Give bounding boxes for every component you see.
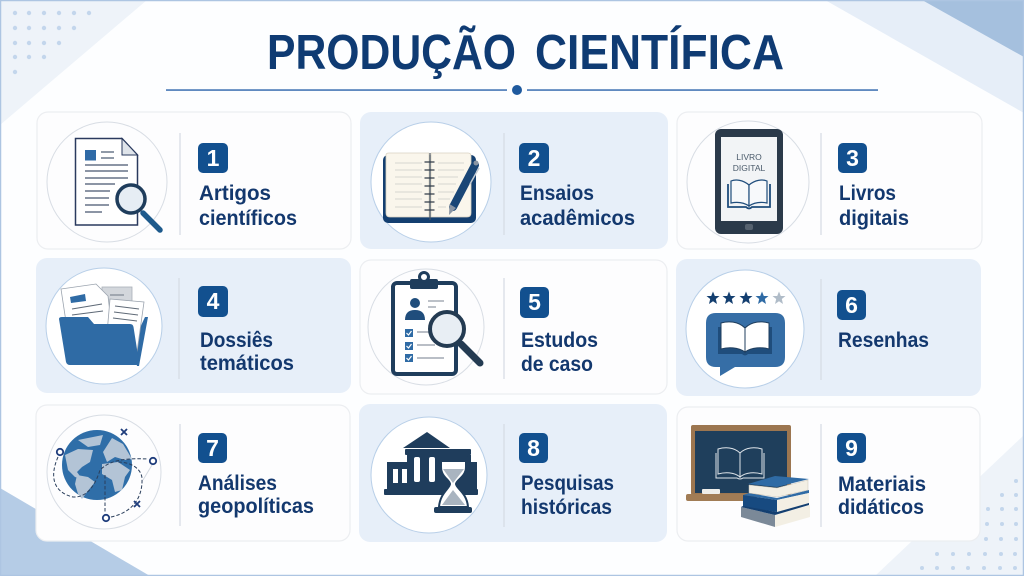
number badge 6: 6: [845, 292, 858, 318]
panel: card 3 livros digitais: [677, 112, 982, 249]
icon: star rating: [706, 292, 786, 304]
number badge 1: [198, 143, 228, 173]
number badge 7: [198, 433, 227, 463]
panel: card 8 pesquisas históricas: [359, 404, 667, 542]
icon: open book on tablet: [728, 180, 770, 208]
label 5: de caso: [521, 353, 593, 376]
title: PRODUÇÃO: [267, 26, 516, 80]
icon: classical building with hourglass: [384, 432, 478, 513]
icon: globe with routes: [54, 429, 156, 521]
number badge 1: 1: [207, 145, 220, 171]
panel: card 2 ensaios acadêmicos: [360, 112, 668, 249]
icon: tablet with digital book: DIGITAL: [733, 163, 765, 173]
label 3: digitais: [839, 207, 909, 230]
label 5: Estudos: [521, 329, 598, 352]
label 6: Resenhas: [838, 329, 929, 352]
panel: card 4 dossiês temáticos: [36, 258, 351, 393]
number badge 2: [519, 143, 549, 173]
background: dot pattern top left: [13, 11, 91, 74]
icon: tablet with digital book: LIVRO: [736, 152, 762, 162]
number badge 4: [198, 286, 228, 317]
label 7: geopolíticas: [198, 495, 314, 518]
number badge 9: 9: [845, 435, 858, 461]
icon: spiral notebook with pen: [383, 153, 479, 223]
panel: card 7 análises geopolíticas: [36, 405, 350, 541]
label 8: históricas: [521, 496, 612, 519]
label 9: didáticos: [838, 496, 924, 519]
number badge 7: 7: [206, 435, 219, 461]
number badge 8: [519, 433, 548, 463]
icon: clipboard with magnifier: [393, 272, 480, 374]
icon: document with magnifier: [76, 138, 160, 230]
panel: card 9 materiais didáticos: [677, 407, 980, 541]
panel: card 6 resenhas: [676, 259, 981, 396]
number badge 6: [837, 290, 866, 320]
number badge 5: [520, 287, 549, 318]
number badge 8: 8: [527, 435, 540, 461]
number badge 3: [838, 143, 867, 173]
icon: folder with papers: [59, 284, 148, 366]
label 4: temáticos: [200, 352, 294, 375]
number badge 2: 2: [528, 145, 540, 171]
label 2: Ensaios: [520, 182, 594, 205]
icon: blackboard with books: [686, 425, 810, 527]
background: dot pattern bottom right: [920, 479, 1018, 570]
label 9: Materiais: [838, 473, 926, 496]
number badge 4: 4: [207, 288, 220, 314]
label 4: Dossiês: [200, 329, 273, 352]
number badge 5: 5: [528, 289, 541, 315]
number badge 3: 3: [846, 145, 859, 171]
title rule with dot: [166, 85, 878, 95]
label 1: Artigos: [199, 182, 271, 205]
icon: tablet with digital book: [715, 129, 783, 234]
panel: card 1 artigos científicos: [37, 112, 351, 249]
title: CIENTÍFICA: [535, 26, 784, 80]
label 2: acadêmicos: [520, 207, 635, 230]
label 8: Pesquisas: [521, 472, 614, 495]
label 3: Livros: [839, 182, 896, 205]
label 7: Análises: [198, 472, 277, 495]
number badge 9: [837, 433, 866, 463]
label 1: científicos: [199, 207, 297, 230]
panel: card 5 estudos de caso: [360, 260, 667, 394]
icon: speech bubble with book: [706, 313, 785, 376]
